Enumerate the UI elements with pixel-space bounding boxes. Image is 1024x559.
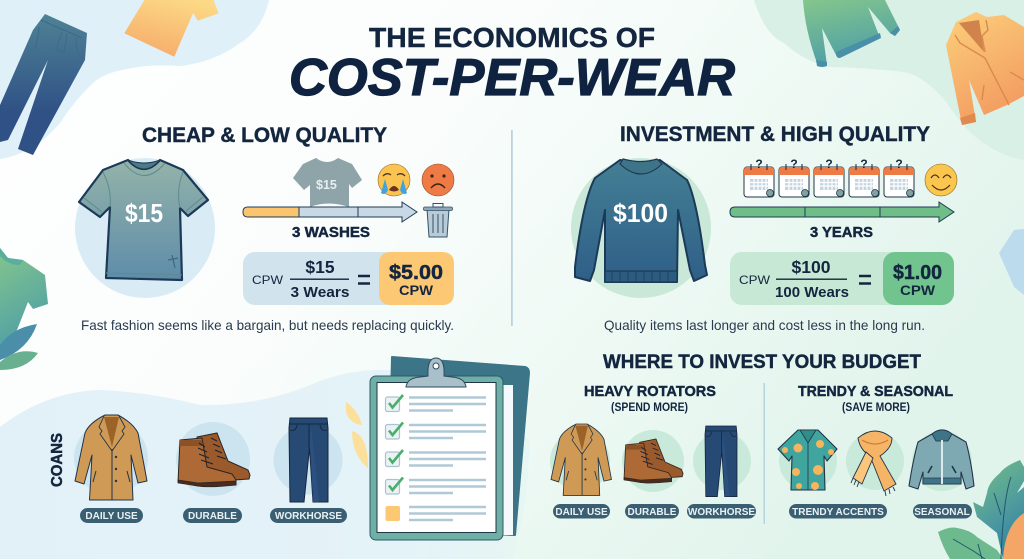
item: trousers workhorse xyxy=(687,426,756,518)
icon: floating jeans xyxy=(0,14,87,155)
item: trousers workhorse xyxy=(270,418,347,523)
heading: investment and high quality: INVESTMENT & HIGH QUALITY xyxy=(620,122,930,146)
icons: five calendars: ? xyxy=(860,157,868,171)
formula: cost per wear cheap: $15 xyxy=(305,257,335,277)
formula: cost per wear cheap: 3 Wears xyxy=(290,285,350,301)
icon: cheap t-shirt with price: $15 xyxy=(125,198,163,228)
icons: five calendars: ? xyxy=(895,157,903,171)
heading: where to invest: WHERE TO INVEST YOUR BUDGET xyxy=(603,351,921,373)
icon: floating orange jacket xyxy=(946,12,1024,125)
item: bomber jacket seasonal xyxy=(909,430,974,518)
subheading: heavy rotators: HEAVY ROTATORS xyxy=(584,383,716,400)
icon: sad face xyxy=(422,164,454,196)
formula: cost per wear quality: CPW xyxy=(739,273,771,287)
icon: quality sweater with price xyxy=(571,158,711,298)
icon: quality sweater with price: $100 xyxy=(613,198,668,228)
icon: bottom-right leaves and orange shape xyxy=(938,460,1024,559)
label: 3 years: 3 YEARS xyxy=(810,225,873,241)
item: boots durable xyxy=(176,422,250,523)
formula: cost per wear cheap: $5.00 xyxy=(389,262,443,284)
label: 3 washes: 3 WASHES xyxy=(292,225,370,241)
icons: five calendars: ? xyxy=(790,157,798,171)
subheading: trendy and seasonal: (SAVE MORE) xyxy=(842,402,910,414)
decorative petals xyxy=(346,402,368,468)
timeline arrow: 3 years xyxy=(730,202,954,222)
caption: quality: Quality items last longer and cost less in the long run. xyxy=(604,317,925,333)
divider xyxy=(511,130,513,326)
panel: left wardrobe staples xyxy=(49,415,347,523)
heading: cheap and low quality: CHEAP & LOW QUALITY xyxy=(142,123,387,147)
item: boots durable: DURABLE xyxy=(188,511,237,522)
icon: worn small t-shirt: $15 xyxy=(316,178,337,192)
item: trousers workhorse: WORKHORSE xyxy=(688,507,755,518)
icon: worn small t-shirt xyxy=(293,158,362,207)
panel: cheap and low quality xyxy=(75,123,454,333)
subheading: heavy rotators: (SPEND MORE) xyxy=(611,402,688,414)
rotated label: coans: COANS xyxy=(49,433,66,487)
icon: cheap t-shirt with price xyxy=(75,158,215,298)
item: coat daily use xyxy=(74,415,148,523)
item: trousers workhorse: WORKHORSE xyxy=(275,511,342,522)
title: THE ECONOMICS OF xyxy=(369,22,655,53)
formula: cost per wear quality: $1.00 xyxy=(893,262,942,284)
icon: floating yellow shirt xyxy=(125,0,218,56)
icon: floating green sweater xyxy=(803,0,900,67)
formula: cost per wear cheap: CPW xyxy=(252,273,284,287)
panel: where to invest your budget xyxy=(550,351,974,524)
item: coat daily use xyxy=(550,424,611,518)
formula: cost per wear cheap xyxy=(243,252,454,305)
subheading: trendy and seasonal xyxy=(798,383,953,414)
icon: trash can xyxy=(424,204,452,237)
icon: crying face xyxy=(378,164,410,196)
title xyxy=(289,22,735,107)
formula: cost per wear quality: CPW xyxy=(900,283,935,298)
title: COST-PER-WEAR xyxy=(289,49,735,107)
icons: five calendars xyxy=(744,157,914,197)
formula: cost per wear quality xyxy=(730,252,954,305)
icon: clipboard checklist xyxy=(370,357,529,540)
item: patterned shirt trendy accents: TRENDY ACCENTS xyxy=(792,507,884,518)
item: scarf xyxy=(846,431,904,496)
item: bomber jacket seasonal: SEASONAL xyxy=(914,507,970,518)
icons: five calendars: ? xyxy=(825,157,833,171)
icon: smiling face xyxy=(925,164,957,196)
item: patterned shirt trendy accents xyxy=(778,430,887,518)
timeline arrow: 3 washes xyxy=(243,202,417,222)
item: coat daily use: DAILY USE xyxy=(85,511,138,522)
icons: five calendars: ? xyxy=(755,157,763,171)
icon: floating green tee and leaves xyxy=(0,248,48,370)
item: boots durable: DURABLE xyxy=(628,507,677,518)
item: boots durable xyxy=(622,430,684,518)
panel: investment and high quality xyxy=(571,122,957,333)
formula: cost per wear quality: $100 xyxy=(792,257,831,277)
item: coat daily use: DAILY USE xyxy=(555,507,608,518)
formula: cost per wear cheap: CPW xyxy=(399,283,433,298)
subheading: trendy and seasonal: TRENDY & SEASONAL xyxy=(798,383,953,400)
subheading: heavy rotators xyxy=(584,383,716,414)
formula: cost per wear quality: 100 Wears xyxy=(775,285,849,301)
caption: cheap: Fast fashion seems like a bargain, but needs replacing quickly. xyxy=(81,317,454,333)
